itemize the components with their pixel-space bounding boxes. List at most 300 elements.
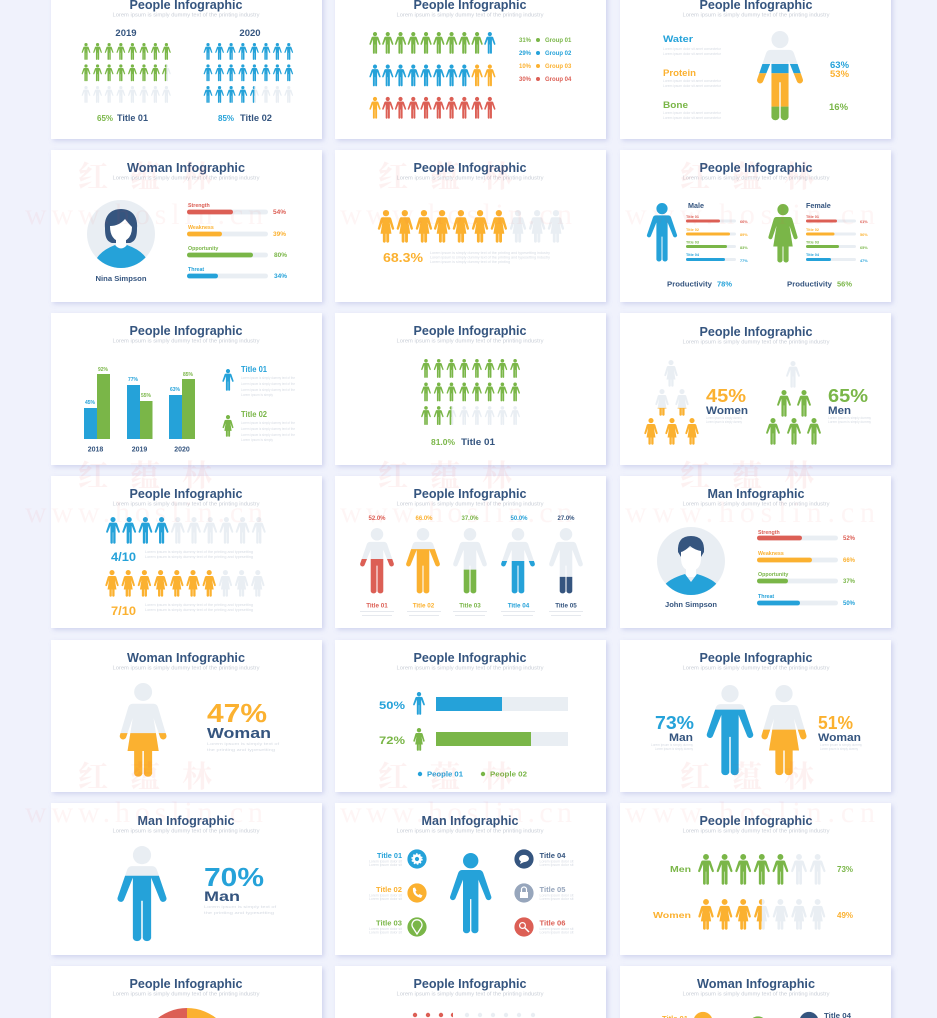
stat: woman: Lorem ipsum is simply dummy — [820, 747, 858, 751]
legend: 29% — [519, 51, 532, 57]
panel: men and women rows — [620, 803, 891, 955]
female bars: Title 04 — [806, 253, 820, 257]
subtitle: Lorem ipsum is simply dummy text of the printing industry — [682, 502, 830, 508]
stat: woman: Lorem ipsum is simply dummy — [820, 743, 862, 747]
caption: Title 01 — [461, 437, 495, 447]
heading: People Infographic — [414, 977, 527, 991]
pictogram 2020 — [204, 43, 293, 103]
percent labels — [368, 516, 575, 522]
stat: woman: 51% — [818, 713, 853, 733]
male bars — [686, 201, 748, 263]
caption — [431, 437, 495, 447]
percent labels: 37.0% — [461, 516, 479, 522]
left labels: Lorem ipsum dolor sit — [369, 927, 403, 931]
text block 1: Lorem ipsum is simply dummy text of the — [241, 388, 295, 392]
values: 63% — [830, 60, 850, 71]
bars: Strength — [758, 530, 780, 536]
right labels: Lorem ipsum dolor sit — [540, 897, 574, 901]
women row — [105, 570, 264, 597]
row: man — [379, 692, 568, 715]
men stat — [828, 386, 871, 424]
labels: Protein — [663, 68, 696, 79]
men row — [670, 854, 853, 885]
bar chart: 63% — [170, 387, 181, 393]
women stat: 45% — [706, 386, 746, 406]
right labels — [540, 853, 574, 934]
subtitle: Lorem ipsum is simply dummy text of the printing industry — [112, 338, 260, 344]
female bars: 61% — [860, 220, 868, 224]
subtitle: Lorem ipsum is simply dummy text of the printing industry — [396, 176, 544, 182]
bars: 39% — [273, 231, 286, 238]
watermark: 红蕴林 — [78, 451, 234, 495]
heading: People Infographic — [700, 651, 813, 665]
men stat: 4/10 — [111, 552, 136, 564]
panel: people dots (cropped) — [335, 966, 606, 1018]
bar chart — [84, 367, 195, 454]
watermark: 红蕴林 — [378, 451, 534, 495]
women stat: Lorem ipsum is simply dummy — [706, 420, 742, 424]
text block 2: Title 02 — [241, 410, 268, 419]
stat: woman — [818, 713, 862, 751]
legend: Group 03 — [545, 64, 572, 70]
percent labels: 27.0% — [557, 516, 575, 522]
caption 2019 — [97, 113, 148, 123]
subtitle: Lorem ipsum is simply dummy text of the printing industry — [682, 12, 830, 18]
labels: Lorem ipsum dolor sit amet consectetur — [663, 47, 722, 51]
icon: woman — [768, 204, 798, 262]
panel: people 2019 vs 2020 — [51, 0, 322, 139]
subtitle: Lorem ipsum is simply dummy text of the printing industry — [396, 338, 544, 344]
watermark: 红蕴林 — [680, 451, 836, 495]
legend: Group 02 — [545, 51, 572, 57]
label 2019: 2019 — [115, 28, 137, 39]
right labels: Title 04 — [540, 853, 566, 860]
subtitle: Lorem ipsum is simply dummy text of the printing industry — [682, 828, 830, 834]
heading: Man Infographic — [422, 814, 519, 828]
right labels: Title 06 — [540, 920, 566, 928]
bar chart: 85% — [183, 372, 194, 378]
donut — [140, 1008, 234, 1018]
bar chart: 92% — [98, 367, 109, 373]
women stat: Lorem ipsum is simply dummy text of the printing and typesetting — [145, 603, 253, 607]
labels: Lorem ipsum dolor sit amet consectetur — [663, 84, 722, 88]
stat: man: Lorem ipsum is simply dummy — [655, 747, 693, 751]
watermark: www.hoslin.cn — [25, 496, 263, 529]
heading: Woman Infographic — [127, 161, 245, 175]
icon: phone — [407, 883, 427, 903]
icon: pin — [407, 917, 427, 937]
percent labels: 66.0% — [415, 516, 433, 522]
male bars: 89% — [740, 233, 748, 237]
bars: Strength — [188, 203, 210, 209]
subtitle: Lorem ipsum is simply dummy text of the printing industry — [396, 666, 544, 672]
stat: Lorem ipsum is simply text of — [204, 905, 277, 909]
panel: Nina Simpson profile — [51, 150, 322, 302]
text block 1: Lorem ipsum is simply — [241, 393, 273, 397]
subtitle: Lorem ipsum is simply dummy text of the printing industry — [682, 666, 830, 672]
subtitle: Lorem ipsum is simply dummy text of the printing industry — [396, 502, 544, 508]
watermark: 红蕴林 — [78, 152, 234, 196]
stat: man: Man — [669, 732, 693, 744]
men stat: Men — [828, 405, 851, 417]
bars: Threat — [188, 267, 204, 273]
panel: groups — [335, 0, 606, 139]
bar chart: 2019 — [132, 446, 147, 454]
left labels: Title 01 — [377, 853, 402, 860]
male bars: Title 02 — [686, 228, 699, 232]
values — [829, 60, 850, 113]
heading: Man Infographic — [138, 814, 235, 828]
pictogram — [378, 210, 564, 243]
figure — [120, 683, 166, 777]
panel: women men pyramids — [620, 313, 891, 465]
panel: John Simpson profile — [620, 476, 891, 628]
watermark: www.hoslin.cn — [340, 198, 572, 231]
stat: 70% — [204, 862, 264, 892]
figure — [450, 853, 491, 933]
right labels: Lorem ipsum dolor sit — [540, 930, 574, 934]
caption 2019: Title 01 — [117, 113, 148, 123]
figure: man — [707, 685, 753, 775]
subtitle: Lorem ipsum is simply dummy text of the printing industry — [682, 176, 830, 182]
stat: 47% — [207, 698, 267, 728]
bars: Opportunity — [188, 246, 218, 252]
row: woman: 72% — [379, 735, 405, 747]
male bars: Title 01 — [686, 215, 699, 219]
pictogram 2019 — [82, 43, 171, 103]
men stat: Lorem ipsum is simply dummy — [828, 416, 871, 420]
left labels — [369, 853, 403, 934]
bars: 50% — [843, 601, 856, 607]
panel: male female productivity — [620, 150, 891, 302]
legend: Group 04 — [545, 77, 572, 83]
stat: Woman — [207, 725, 271, 742]
subtitle: Lorem ipsum is simply dummy text of the printing industry — [396, 12, 544, 18]
subtitle: Lorem ipsum is simply dummy text of the printing industry — [112, 828, 260, 834]
pictogram — [421, 359, 520, 425]
women stat: Lorem ipsum is simply dummy — [706, 416, 742, 420]
watermark: 红蕴林 — [680, 752, 836, 796]
heading: People Infographic — [414, 324, 527, 338]
text block 2: Lorem ipsum is simply — [241, 438, 273, 442]
stat: man: Lorem ipsum is simply dummy — [651, 743, 693, 747]
figures — [360, 528, 583, 593]
men row: 73% — [837, 865, 853, 874]
labels: Water — [663, 34, 693, 45]
men pyramid — [766, 361, 821, 445]
productivity labels — [667, 280, 852, 288]
heading: Man Infographic — [708, 487, 805, 501]
panel: 68.3 percent — [335, 150, 606, 302]
subtitle: Lorem ipsum is simply dummy text of the printing industry — [112, 502, 260, 508]
title labels: Title 04 — [508, 602, 530, 610]
bars: 80% — [274, 252, 287, 259]
watermark: 红蕴林 — [680, 152, 836, 196]
bar chart: 55% — [141, 393, 152, 399]
female bars: Title 01 — [806, 215, 819, 219]
caption 2020 — [218, 113, 272, 123]
productivity labels: 78% — [717, 280, 732, 288]
watermark: 红蕴林 — [78, 752, 234, 796]
legend: People 02 — [490, 772, 527, 778]
text block 2: Lorem ipsum is simply dummy text of the — [241, 427, 295, 431]
percent labels: 52.0% — [368, 516, 386, 522]
icon: woman — [223, 415, 233, 437]
legend — [519, 38, 572, 83]
text block 2 — [241, 410, 295, 442]
body text: Lorem ipsum is simply dummy text of the printing and typesetting industry — [430, 251, 550, 255]
stat — [207, 698, 280, 752]
title labels: Title 01 — [366, 602, 388, 610]
male bars: 77% — [740, 259, 748, 263]
female bars: Title 02 — [806, 228, 819, 232]
subtitle: Lorem ipsum is simply dummy text of the printing industry — [112, 176, 260, 182]
right labels: Lorem ipsum dolor sit — [540, 927, 574, 931]
figure: woman — [761, 685, 807, 775]
watermark: 红蕴林 — [378, 152, 534, 196]
row: man: 50% — [379, 700, 405, 712]
left labels: Title 03 — [376, 920, 402, 928]
female bars: 47% — [860, 259, 868, 263]
bars: 52% — [843, 536, 856, 542]
panel: man with six icons — [335, 803, 606, 955]
labels: Lorem ipsum dolor sit amet consectetur — [663, 79, 722, 83]
labels: Bone — [663, 100, 688, 111]
caption 2020: Title 02 — [240, 113, 272, 123]
legend — [418, 772, 527, 778]
left labels: Lorem ipsum dolor sit — [369, 894, 403, 898]
stat: Man — [204, 888, 240, 904]
female bars: Title 03 — [806, 240, 819, 244]
legend: 31% — [519, 38, 532, 44]
watermark: www.hoslin.cn — [25, 796, 263, 829]
heading: People Infographic — [700, 161, 813, 175]
productivity labels: 56% — [837, 280, 852, 288]
subtitle: Lorem ipsum is simply dummy text of the printing industry — [396, 992, 544, 998]
women pyramid — [644, 360, 699, 445]
men stat: Lorem ipsum is simply dummy — [828, 420, 871, 424]
legend: People 01 — [427, 772, 463, 778]
male bars: Title 03 — [686, 240, 699, 244]
bars: Opportunity — [758, 572, 788, 578]
male bars: Male — [688, 201, 704, 210]
right labels: Lorem ipsum dolor sit — [540, 894, 574, 898]
panel: man 70 percent — [51, 803, 322, 955]
female bars: Female — [806, 201, 831, 210]
watermark: www.hoslin.cn — [340, 496, 572, 529]
bars: 66% — [843, 558, 856, 564]
labels: Lorem ipsum dolor sit amet consectetur — [663, 52, 722, 56]
stat: the printing and typesetting — [207, 748, 275, 752]
productivity labels: Productivity — [667, 280, 713, 288]
heading: People Infographic — [700, 325, 813, 339]
text block 2: Lorem ipsum is simply dummy text of the — [241, 421, 295, 425]
panel: bar chart — [51, 313, 322, 465]
text block 1: Lorem ipsum is simply dummy text of the — [241, 376, 295, 380]
men row: Men — [670, 865, 691, 874]
women stat — [706, 386, 748, 424]
women row: Women — [653, 911, 691, 920]
women stat: Women — [706, 405, 748, 417]
bar chart: 2020 — [174, 446, 190, 454]
title labels — [366, 602, 577, 610]
women stat: 7/10 — [111, 606, 136, 618]
body text: Lorem ipsum is simply dummy text of the printing — [430, 260, 510, 264]
labels: Lorem ipsum dolor sit amet consectetur — [663, 111, 722, 115]
women stat — [111, 603, 253, 618]
bar chart: 45% — [85, 400, 96, 406]
left labels: Lorem ipsum dolor sit — [369, 930, 403, 934]
body text — [430, 251, 550, 264]
bars — [757, 530, 856, 607]
subtitle: Lorem ipsum is simply dummy text of the printing industry — [396, 828, 544, 834]
subtitle: Lorem ipsum is simply dummy text of the printing industry — [682, 340, 830, 346]
heading: Woman Infographic — [127, 651, 245, 665]
labels — [663, 34, 722, 120]
panel: woman icons (cropped) — [620, 966, 891, 1018]
men stat: 65% — [828, 386, 868, 406]
heading: People Infographic — [414, 487, 527, 501]
icon: man — [222, 369, 234, 391]
icon: search — [514, 917, 534, 937]
left labels: Lorem ipsum dolor sit — [369, 860, 403, 864]
icon: man — [647, 203, 677, 261]
title labels: Title 02 — [413, 602, 435, 610]
legend: 10% — [519, 64, 532, 70]
heading: Woman Infographic — [697, 977, 815, 991]
heading: People Infographic — [130, 324, 243, 338]
male bars: 66% — [740, 220, 748, 224]
female bars: 65% — [860, 246, 868, 250]
figure — [757, 31, 803, 120]
values: 16% — [829, 102, 849, 113]
productivity labels: Productivity — [787, 280, 833, 288]
icon: lock — [514, 883, 534, 903]
value: 68.3% — [383, 250, 423, 265]
female bars: 56% — [860, 233, 868, 237]
subtitle: Lorem ipsum is simply dummy text of the printing industry — [112, 666, 260, 672]
stat — [204, 862, 277, 915]
panel: man woman 73 51 — [620, 640, 891, 792]
watermark — [25, 152, 875, 829]
stat: woman: Woman — [818, 732, 861, 744]
heading: People Infographic — [130, 977, 243, 991]
men row — [106, 517, 266, 544]
right labels: Lorem ipsum dolor sit — [540, 860, 574, 864]
left labels: Lorem ipsum dolor sit — [369, 897, 403, 901]
subtitle: Lorem ipsum is simply dummy text of the printing industry — [112, 12, 260, 18]
bars — [187, 203, 287, 280]
bars: 54% — [273, 209, 286, 216]
panel: bars 50 and 72 — [335, 640, 606, 792]
watermark: www.hoslin.cn — [340, 796, 572, 829]
avatar — [87, 200, 155, 270]
women stat: Lorem ipsum is simply dummy text of the printing and typesetting — [145, 608, 253, 612]
panel: donut (cropped) — [51, 966, 322, 1018]
pictogram heads — [413, 1013, 535, 1017]
watermark: www.hoslin.cn — [625, 198, 875, 231]
stat: Lorem ipsum is simply text of — [207, 742, 280, 746]
legend: Group 01 — [545, 38, 572, 44]
caption 2019: 65% — [97, 114, 113, 123]
body text: Lorem ipsum is simply dummy text of the printing and typesetting industry — [430, 256, 550, 260]
pictogram rows — [369, 32, 495, 119]
icon: gear — [407, 849, 427, 869]
title labels: Title 03 — [459, 602, 481, 610]
left labels: Title 02 — [376, 887, 402, 894]
panel: 81 percent — [335, 313, 606, 465]
caption: 81.0% — [431, 437, 455, 447]
values: 53% — [830, 69, 850, 80]
male bars: 83% — [740, 246, 748, 250]
men stat: Lorem ipsum is simply dummy text of the printing and typesetting — [145, 555, 253, 559]
avatar — [657, 527, 725, 598]
icon row — [693, 1012, 819, 1018]
bar chart: 77% — [128, 377, 139, 383]
men stat — [111, 550, 253, 564]
text block 1: Title 01 — [241, 365, 268, 374]
stat: man — [651, 713, 694, 751]
figure — [117, 846, 167, 941]
text block 1: Lorem ipsum is simply dummy text of the — [241, 382, 295, 386]
name: John Simpson — [665, 602, 717, 609]
row: woman — [379, 728, 568, 751]
bars: 34% — [274, 273, 287, 280]
left labels: Lorem ipsum dolor sit — [369, 863, 403, 867]
male bars: Title 04 — [686, 253, 700, 257]
watermark: www.hoslin.cn — [625, 796, 875, 829]
labels: Lorem ipsum dolor sit amet consectetur — [663, 116, 722, 120]
title labels: Title 05 — [555, 602, 577, 610]
heading: People Infographic — [414, 651, 527, 665]
watermark: www.hoslin.cn — [25, 198, 263, 231]
panel: 4/10 and 7/10 — [51, 476, 322, 628]
subtitle: Lorem ipsum is simply dummy text of the printing industry — [682, 992, 830, 998]
panel: five figures — [335, 476, 606, 628]
panel: water protein bone — [620, 0, 891, 139]
bars: Threat — [758, 594, 774, 600]
right labels: Title 05 — [540, 887, 566, 894]
female bars — [806, 201, 868, 263]
text block 2: Lorem ipsum is simply dummy text of the — [241, 433, 295, 437]
bar chart: 2018 — [88, 446, 103, 454]
legend: 30% — [519, 77, 532, 83]
women row — [653, 899, 853, 930]
watermark: www.hoslin.cn — [625, 496, 875, 529]
bars: Weakness — [188, 225, 214, 231]
bars: Weakness — [758, 551, 784, 557]
small captions — [360, 611, 583, 616]
stat: man: 73% — [655, 713, 694, 733]
icon: chat — [514, 849, 534, 869]
women row: 49% — [837, 911, 853, 920]
subtitle: Lorem ipsum is simply dummy text of the printing industry — [112, 992, 260, 998]
right labels: Lorem ipsum dolor sit — [540, 863, 574, 867]
caption 2020: 85% — [218, 114, 234, 123]
bars: 37% — [843, 579, 856, 585]
heading: People Infographic — [414, 161, 527, 175]
panel: woman 47 percent — [51, 640, 322, 792]
name: Nina Simpson — [96, 276, 146, 283]
men stat: Lorem ipsum is simply dummy text of the printing and typesetting — [145, 550, 253, 554]
watermark: 红蕴林 — [378, 752, 534, 796]
percent labels: 50.0% — [510, 516, 528, 522]
label 2020: 2020 — [239, 28, 261, 39]
text block 1 — [241, 365, 295, 397]
stat: the printing and typesetting — [204, 911, 274, 915]
heading: People Infographic — [130, 487, 243, 501]
heading: People Infographic — [700, 814, 813, 828]
